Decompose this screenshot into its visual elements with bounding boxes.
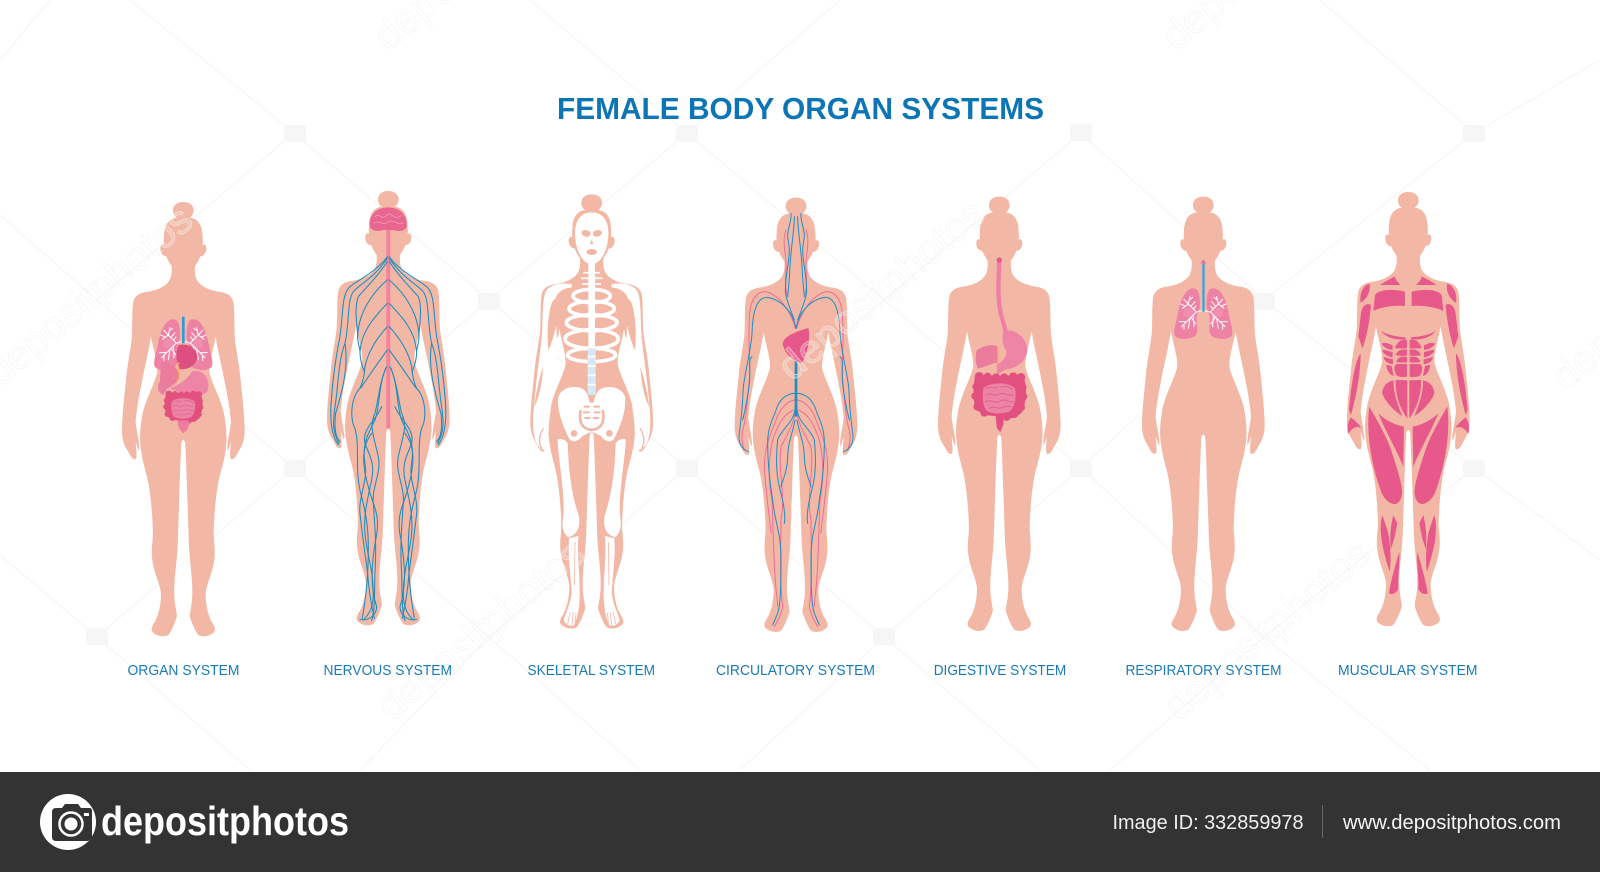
icon: heart [176, 344, 197, 369]
watermark text: depositphotos [1156, 531, 1379, 729]
figure: digestive system [938, 197, 1061, 631]
labels [128, 662, 1478, 679]
icon: bile duct [997, 346, 998, 364]
icon: trachea [182, 317, 185, 343]
icon: stomach [997, 330, 1027, 375]
label: circulatory system: CIRCULATORY SYSTEM [716, 662, 875, 679]
icon: intestines [971, 372, 1027, 432]
footer bar [0, 772, 1600, 872]
icon: bile duct [176, 363, 181, 379]
figure: organ system [122, 202, 245, 636]
image id: Image ID: 332859978 [1112, 812, 1304, 834]
watermark camera icons [86, 124, 1485, 645]
icon: heart [783, 328, 809, 363]
spinal cord [386, 230, 390, 428]
label: organ system: ORGAN SYSTEM [128, 662, 240, 679]
icon: stomach [170, 371, 208, 395]
icon: kidney side [158, 379, 167, 395]
label: skeletal system: SKELETAL SYSTEM [528, 662, 655, 679]
blood vessels [739, 213, 853, 627]
sacrum [580, 407, 603, 430]
lumbar vertebrae [588, 348, 596, 395]
figure: respiratory system [1142, 197, 1265, 631]
figure: skeletal system [530, 194, 653, 629]
label: respiratory system: RESPIRATORY SYSTEM [1126, 662, 1282, 679]
icon: larynx [1200, 259, 1206, 263]
icon: liver [976, 345, 998, 368]
label: nervous system: NERVOUS SYSTEM [324, 662, 452, 679]
muscles [1348, 276, 1469, 594]
figure: circulatory system [735, 198, 857, 632]
icon: lungs [1174, 288, 1232, 339]
logo icon: camera [40, 794, 96, 850]
label: digestive system: DIGESTIVE SYSTEM [934, 662, 1066, 679]
rib cage [565, 289, 618, 362]
figure: nervous system [327, 191, 450, 625]
title: FEMALE BODY ORGAN SYSTEMS [557, 91, 1044, 126]
arm and leg bones [533, 284, 650, 626]
icon: intestines [163, 391, 203, 431]
logo wordmark: depositphotos [101, 798, 349, 844]
icon: lungs [154, 319, 212, 370]
watermark text: depositphotos [370, 531, 593, 729]
figure: muscular system [1347, 192, 1470, 626]
icon: esophagus [998, 260, 1007, 335]
nerves [331, 257, 446, 621]
icon: bladder [178, 420, 189, 433]
icon: liver [160, 363, 179, 390]
icon: brain [370, 207, 407, 231]
icon: skull [575, 212, 608, 263]
aorta [795, 360, 797, 417]
website url: www.depositphotos.com [1342, 812, 1561, 834]
label: muscular system: MUSCULAR SYSTEM [1338, 662, 1478, 679]
icon: trachea [1202, 263, 1205, 312]
watermark text: depositphotos [770, 191, 993, 389]
spine [588, 263, 595, 350]
neck vertebrae [581, 273, 602, 284]
